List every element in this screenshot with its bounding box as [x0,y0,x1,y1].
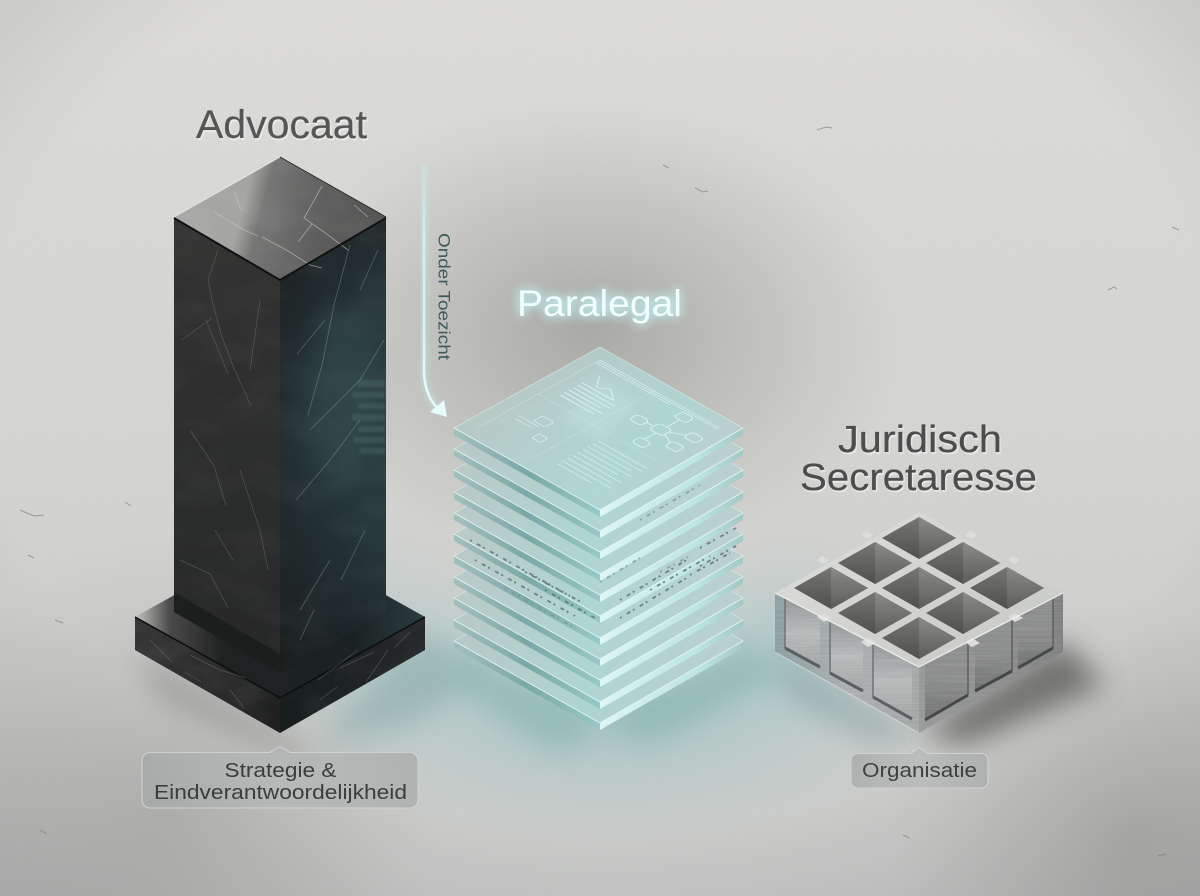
pillar top face [174,157,386,280]
arrow: Onder Toezicht [424,165,447,417]
callout: Strategie & Eindverantwoordelijkheid [142,746,418,808]
callout: Organisatie [851,748,988,788]
right face with panels [919,593,1063,733]
heading line 2: Secretaresse [800,457,1037,499]
heading: Juridisch Secretaresse [800,419,1037,499]
base block [135,536,425,733]
glass sheet 4 [454,411,743,581]
glass sheet 8 [454,496,743,666]
speckled documents visible between sheets [470,485,736,628]
glass sheet 11 [454,560,743,730]
pillar left face [174,217,280,673]
glass sheet 7 [454,475,743,645]
heading: Paralegal: Paralegal [517,283,682,324]
glass sheet 2 [454,368,743,538]
shadows under objects [135,630,1105,775]
glass sheet 5 [454,432,743,602]
top lattice [775,512,1063,667]
glass sheet 3 [454,389,743,559]
glass sheet 9 [454,517,743,687]
glass sheet 6 [454,453,743,623]
callout text: Organisatie [862,760,977,782]
etched document on top sheet [477,360,721,497]
heading: Advocaat: Advocaat [196,103,367,147]
heading line 1: Juridisch [838,419,1002,461]
aluminium grid block [775,512,1063,733]
pillar right face [280,217,386,673]
callout text line 1: Strategie & [224,760,337,782]
reflection on front corner [560,380,640,440]
top glass sheet [454,347,743,517]
glass sheet 10 [454,539,743,709]
callout text line 2: Eindverantwoordelijkheid [154,782,407,804]
glass sheet stack [454,347,743,730]
arrow label: Onder Toezicht: Onder Toezicht [434,233,454,360]
left face with panels [775,593,919,733]
marble pillar with base [135,157,425,733]
